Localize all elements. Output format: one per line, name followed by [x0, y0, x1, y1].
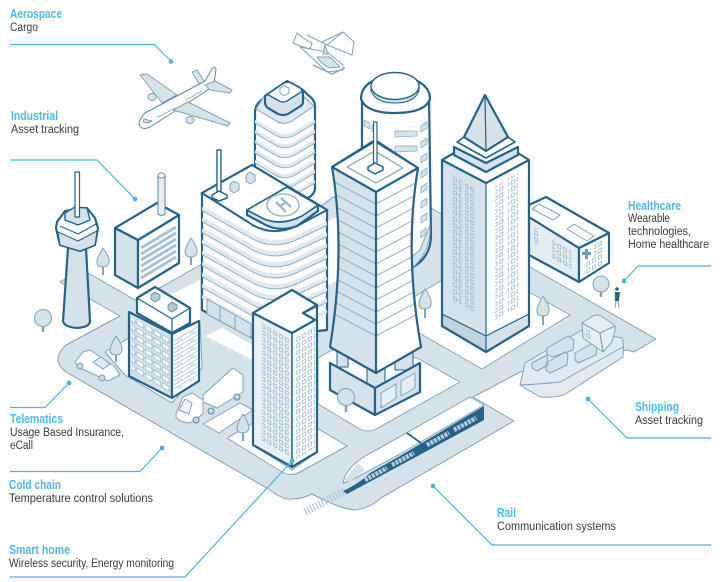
roof units: [151, 292, 177, 312]
chimney: [158, 176, 165, 216]
vent boxes: [230, 181, 239, 193]
callout: aerospace: [10, 6, 173, 64]
tree round clinic: [593, 276, 609, 297]
cockpit: [143, 119, 152, 123]
fuselage and fin: [139, 68, 216, 128]
roof: [332, 141, 418, 192]
callout: healthcare: Wearable: [628, 213, 670, 225]
car wheels: [77, 363, 105, 381]
block: between office and curved tower: [327, 216, 338, 286]
ship: [520, 315, 623, 397]
roof: [253, 290, 317, 333]
roof cap: [265, 82, 303, 115]
callout: telematics: Usage Based Insurance,: [10, 427, 124, 439]
tree conifer by car: [110, 336, 122, 362]
doors: [381, 373, 415, 408]
roof: [529, 197, 609, 248]
callout: cold chain: Cold chain: [9, 477, 61, 492]
callout: smart home: [9, 459, 294, 577]
callout: rail: Rail: [497, 505, 516, 520]
tree conifer by thin tower: [237, 414, 249, 441]
far stabiliser: [192, 70, 205, 85]
tree round left: [34, 310, 52, 332]
block: skyscraper lot: [414, 280, 570, 369]
windows: [131, 318, 170, 393]
outline: [330, 140, 421, 373]
slats: [141, 227, 176, 278]
tree conifer by skyscraper: [537, 296, 549, 325]
near engine: [186, 116, 194, 124]
rotor blades: [307, 32, 354, 55]
callout: aerospace: Cargo: [10, 22, 38, 34]
helicopter: [293, 32, 354, 74]
person: [615, 287, 620, 308]
window bands: [364, 120, 427, 238]
callout: telematics: [10, 381, 124, 452]
block: small building lot: [105, 320, 202, 403]
block: strip under office: [205, 328, 253, 360]
outline: [442, 160, 529, 352]
base band: [442, 314, 486, 352]
head: [56, 208, 98, 251]
antenna: [217, 150, 221, 192]
mast: [323, 45, 328, 54]
building: office with helipad: [202, 150, 327, 338]
tree conifer back left: [97, 248, 109, 275]
mast: [75, 172, 80, 217]
antenna: [374, 122, 377, 164]
helipad: [247, 205, 318, 229]
cabin: [582, 315, 615, 352]
tree conifer mid: [419, 289, 431, 318]
body: [300, 47, 343, 72]
near stabiliser: [205, 81, 232, 93]
carriage divider: [407, 433, 421, 443]
airplane: [139, 68, 232, 128]
cap: [371, 86, 419, 103]
containers: [532, 336, 597, 373]
floor lines: [335, 182, 416, 336]
left face: [330, 167, 376, 373]
building: factory: [115, 173, 179, 288]
callout: healthcare: [622, 198, 711, 283]
callout: healthcare: Healthcare: [628, 198, 681, 213]
callout: cold chain: Temperature control solutions: [9, 493, 153, 505]
callout: shipping: [586, 397, 711, 438]
callout: industrial: Industrial: [11, 108, 58, 123]
right face: [376, 168, 421, 373]
train: [343, 397, 484, 494]
callout: rail: [431, 484, 711, 545]
near wing: [173, 102, 230, 126]
roof ledge: [256, 95, 314, 123]
medical cross: [582, 249, 591, 259]
rail track: [305, 491, 345, 512]
far wing: [140, 74, 177, 103]
callout: telematics: Telematics: [10, 411, 63, 426]
callout: industrial: Asset tracking: [11, 124, 79, 136]
helipad H mark: [267, 194, 299, 216]
ground floor panes: [207, 299, 251, 338]
building: thin front tower: [253, 290, 317, 467]
cabin windows: [158, 91, 202, 117]
roof units: [532, 204, 594, 241]
callout: telematics: eCall: [10, 440, 33, 452]
road network and city blocks: [58, 197, 656, 510]
truck wheels: [193, 394, 240, 423]
stilts: [337, 345, 413, 388]
podium: [330, 363, 375, 415]
rooftop box: [280, 86, 289, 96]
callout: healthcare: technologies,: [628, 226, 691, 238]
roof: [115, 203, 179, 240]
block: thin tower lot: [227, 423, 347, 474]
spire: [464, 95, 508, 151]
roof edge curve: [202, 165, 327, 231]
callout: healthcare: Home healthcare: [628, 239, 709, 251]
tail: [293, 33, 312, 49]
callout: cold chain: [9, 446, 164, 505]
roof tier: [137, 287, 190, 333]
far engine: [148, 94, 156, 100]
callout: shipping: Asset tracking: [635, 415, 703, 427]
callout: industrial: [10, 108, 137, 201]
building: cylinder tower: [361, 72, 431, 268]
windows: [452, 176, 474, 314]
tree round by podium: [338, 388, 354, 412]
building: clinic: [529, 197, 609, 282]
tree conifer right of factory: [185, 238, 197, 265]
building: rounded back tower: [255, 81, 315, 198]
building: observation tower: [56, 172, 98, 328]
callout: shipping: Shipping: [635, 399, 679, 414]
skid: [313, 65, 345, 74]
rim: [361, 74, 430, 113]
block: between small building and office: [150, 280, 200, 340]
truck: [176, 368, 243, 423]
building: skyscraper with spire: [442, 95, 529, 352]
callout: smart home: Smart home: [9, 542, 70, 557]
road surface: [58, 197, 656, 510]
car: [75, 350, 120, 381]
train windows: [365, 418, 476, 480]
roof collar: [442, 153, 529, 183]
cabin windows: [584, 328, 592, 342]
block: truck side strip: [203, 403, 253, 433]
building: curved tower: [325, 122, 427, 415]
callout: rail: Communication systems: [497, 521, 616, 533]
callout: smart home: Wireless security, Energy monitoring: [9, 558, 174, 570]
cockpit glass: [317, 57, 340, 68]
building: small left block: [129, 287, 199, 398]
callout: aerospace: Aerospace: [10, 6, 62, 21]
block: central tower lot: [318, 350, 460, 431]
